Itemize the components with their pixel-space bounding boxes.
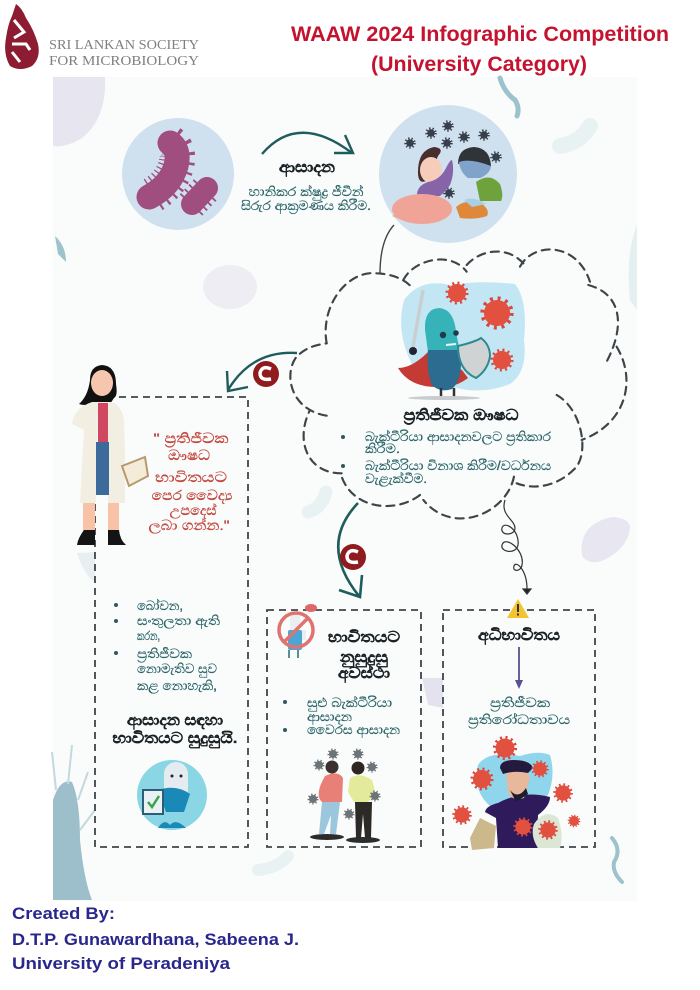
connector line bbox=[380, 225, 394, 274]
arrow: infection bbox=[262, 133, 353, 154]
heading: unsuitable: නුසුදුසු bbox=[339, 649, 388, 668]
heading: infection: ආසාදන bbox=[279, 159, 335, 177]
heading: antibiotic resistance bbox=[468, 695, 570, 728]
list: suitable infections: ප්‍රතිජීවක bbox=[137, 646, 193, 662]
title bbox=[291, 22, 669, 76]
icon: warning triangle bbox=[507, 599, 529, 618]
heading: antibiotics: ප්‍රතිජීවක ඖෂධ bbox=[404, 406, 518, 426]
heading: antibiotic resistance: ප්‍රතිරෝධතාවය bbox=[468, 712, 570, 728]
logo: Sri Lankan Society for Microbiology: FOR MICROBIOLOGY bbox=[49, 53, 200, 68]
credits: University of Peradeniya bbox=[12, 955, 231, 973]
list: suitable infections: කරන, bbox=[137, 628, 160, 643]
logo: Sri Lankan Society for Microbiology bbox=[5, 4, 200, 69]
icon: pill hero with shield bbox=[398, 282, 525, 400]
icon: happy pill bbox=[137, 760, 207, 830]
heading: unsuitable: භාවිතයට bbox=[328, 629, 400, 646]
icon: antibiotic symbol red bbox=[253, 361, 279, 387]
callout: consult doctor: ඖෂධ bbox=[168, 447, 210, 463]
list: suitable infections: බෝවන, bbox=[137, 598, 183, 613]
icon: no pill bbox=[279, 604, 317, 658]
text: suitable statement: ආසාදන සඳහා bbox=[127, 712, 223, 730]
title: WAAW 2024 Infographic Competition bbox=[291, 22, 669, 46]
credits bbox=[12, 905, 299, 973]
callout: consult doctor bbox=[148, 430, 233, 534]
list: suitable infections: නොමැතිව සුව bbox=[137, 661, 217, 677]
icon: bacteria circle bbox=[122, 118, 234, 230]
credits: Created By: bbox=[12, 905, 115, 923]
list: unsuitable cases: ආසාදන bbox=[307, 709, 352, 725]
list: unsuitable cases: වෛරස ආසාදන bbox=[307, 722, 400, 738]
heading: antibiotic resistance: ප්‍රතිජීවක bbox=[490, 695, 551, 711]
list: suitable infections: කළ නොහැකි, bbox=[137, 678, 217, 694]
icon: sick couple bbox=[309, 750, 380, 843]
list: suitable infections: සංතුලතා ඇති bbox=[137, 613, 220, 629]
callout: consult doctor: පෙර වෛද්‍ය bbox=[152, 487, 233, 504]
arrow: to unsuitable uses bbox=[338, 503, 362, 597]
text: infection description: සිරුර ආක්‍රමණය කිරීම. bbox=[241, 198, 371, 214]
callout: consult doctor: භාවිතයට bbox=[155, 469, 227, 485]
icon: doctor bbox=[72, 365, 148, 545]
list: antibiotic uses: වැළැක්වීම. bbox=[365, 471, 427, 487]
panel: doctor advice bbox=[72, 365, 248, 847]
panel: overuse bbox=[443, 599, 595, 850]
background panel bbox=[53, 77, 637, 901]
list: antibiotic uses: කිරීම. bbox=[365, 441, 400, 456]
panel: antibiotics cloud bbox=[290, 249, 626, 518]
callout: consult doctor: " ප්‍රතිජීවක bbox=[154, 430, 229, 448]
list: antibiotic uses bbox=[341, 429, 551, 487]
icon: antibiotic symbol red bbox=[340, 544, 366, 570]
arrow: to doctor advice bbox=[227, 353, 297, 391]
heading: unsuitable bbox=[328, 629, 400, 683]
icon: sick people and animals circle bbox=[379, 105, 517, 243]
callout: consult doctor: උපදෙස් bbox=[170, 502, 216, 519]
text: suitable statement: භාවිතයට සුදුසුයි. bbox=[112, 730, 238, 749]
title: (University Category) bbox=[371, 52, 587, 76]
list: suitable infections bbox=[114, 598, 220, 694]
list: unsuitable cases bbox=[283, 695, 400, 738]
credits: D.T.P. Gunawardhana, Sabeena J. bbox=[12, 931, 299, 949]
list: antibiotic uses: බැක්ටීරියා විනාශ කිරීම/වර්ධනය bbox=[365, 458, 551, 473]
list: antibiotic uses: බැක්ටීරියා ආසාදනවලට ප්‍රතිකාර bbox=[365, 429, 551, 445]
icon: resistant bacteria attacking man bbox=[454, 739, 579, 850]
arrow: overuse to resistance bbox=[515, 647, 523, 689]
list: unsuitable cases: සුළු බැක්ටීරියා bbox=[307, 695, 392, 711]
arrow: squiggle to overuse bbox=[502, 500, 531, 594]
text: infection description: හානිකර ක්ෂුද්‍ර ජීවීන් bbox=[248, 184, 364, 200]
heading: unsuitable: අවස්ථා bbox=[338, 664, 390, 683]
panel: unsuitable uses bbox=[267, 604, 421, 847]
callout: consult doctor: ලබා ගන්න." bbox=[148, 517, 230, 534]
logo: Sri Lankan Society for Microbiology: SRI LANKAN SOCIETY bbox=[49, 37, 200, 52]
text: infection description bbox=[241, 184, 371, 214]
text: suitable statement bbox=[112, 712, 238, 749]
heading: overuse: අධිභාවිතය bbox=[478, 627, 560, 645]
decorative bacteria background bbox=[52, 77, 637, 900]
